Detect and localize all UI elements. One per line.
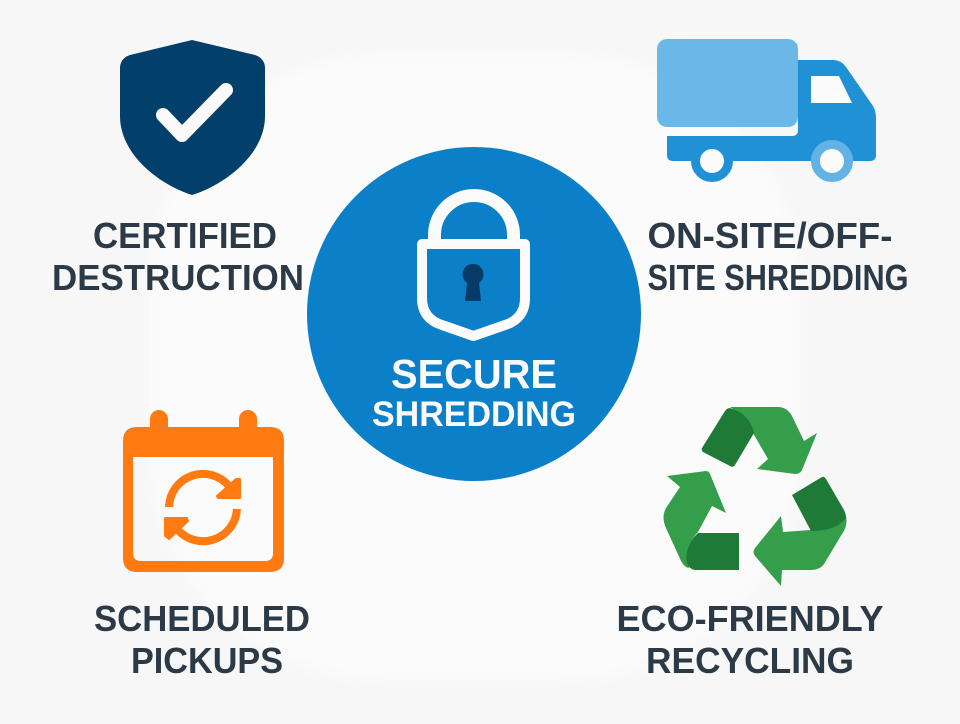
label: eco-friendly recycling: ECO-FRIENDLY bbox=[616, 598, 884, 639]
label: certified destruction: DESTRUCTION bbox=[52, 257, 304, 298]
icon: delivery truck bbox=[657, 39, 876, 178]
label: scheduled pickups bbox=[94, 598, 310, 681]
truck front wheel bbox=[816, 144, 848, 178]
center circle: secure shredding bbox=[307, 147, 641, 481]
truck window bbox=[811, 76, 852, 103]
label: certified destruction bbox=[52, 215, 304, 298]
label: eco-friendly recycling: RECYCLING bbox=[646, 640, 854, 681]
icon: calendar with refresh arrows bbox=[123, 410, 284, 572]
label: scheduled pickups: SCHEDULED bbox=[94, 598, 310, 639]
icon: padlock bbox=[422, 196, 525, 336]
center title: SECURE bbox=[391, 351, 557, 397]
label: on-site / off-site shredding: ON-SITE/OFF- bbox=[648, 215, 892, 256]
top arrow bbox=[730, 407, 817, 474]
label: eco-friendly recycling bbox=[616, 598, 884, 681]
center circle: secure shredding: SHREDDING bbox=[372, 395, 576, 434]
keyhole bbox=[463, 264, 484, 301]
truck rear wheel bbox=[696, 144, 728, 178]
icon: shield with checkmark bbox=[120, 40, 265, 195]
label: on-site / off-site shredding bbox=[648, 215, 908, 298]
label: certified destruction: CERTIFIED bbox=[93, 215, 277, 256]
label: scheduled pickups: PICKUPS bbox=[131, 640, 283, 681]
right arrow bbox=[754, 516, 846, 586]
icon: recycling arrows bbox=[664, 407, 846, 586]
left arrow bbox=[664, 471, 726, 568]
label: on-site / off-site shredding: SITE SHREDDING bbox=[648, 257, 908, 298]
truck cargo box bbox=[657, 39, 798, 127]
